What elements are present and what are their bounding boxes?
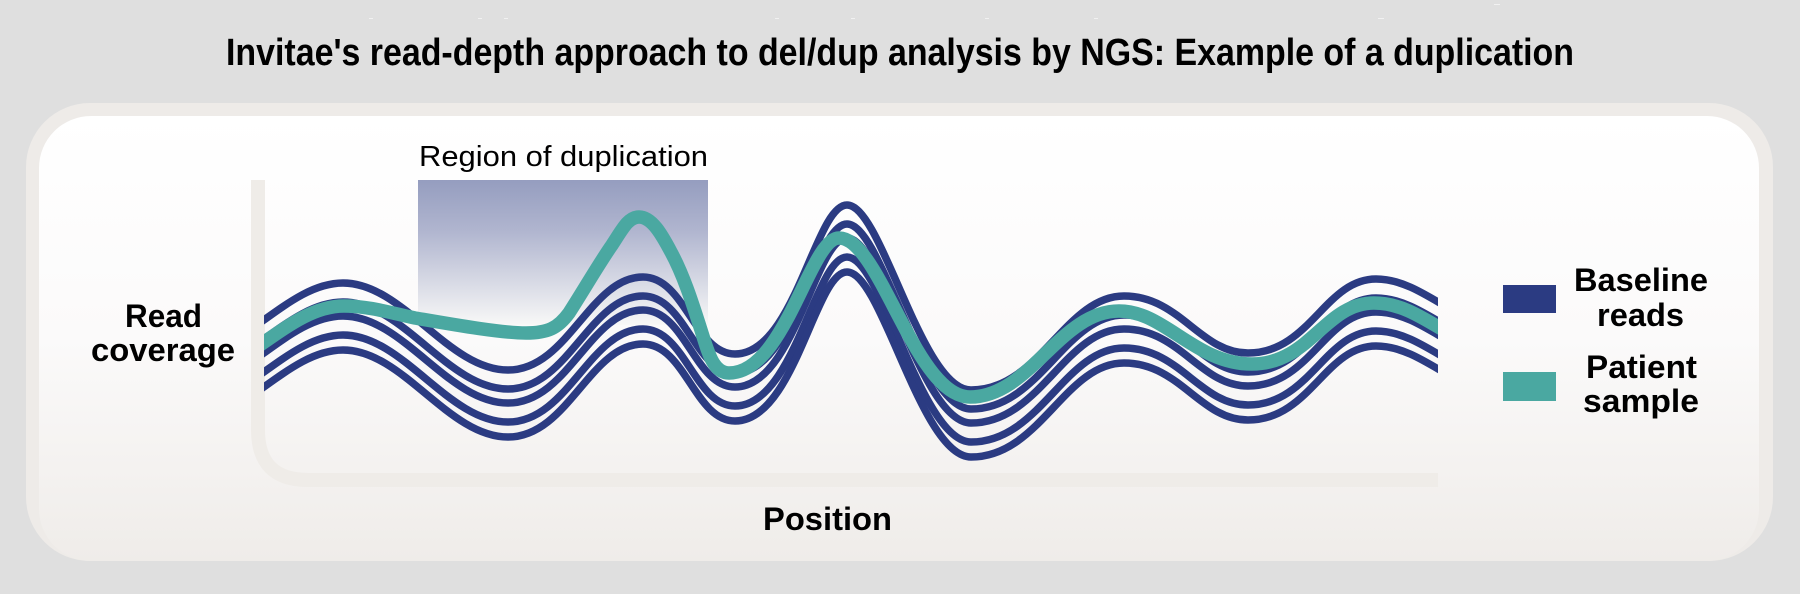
patient sample curve: [250, 217, 1450, 397]
region of duplication label: Region of duplication: [419, 141, 708, 173]
y axis label: coverage: [91, 332, 235, 368]
baseline reads curves: [250, 205, 1450, 457]
y axis label: [91, 298, 235, 368]
legend: baseline reads: reads: [1597, 297, 1684, 333]
title: Invitae's read-depth approach to del/dup analysis by NGS: Example of a duplication: [226, 32, 1574, 74]
region of duplication shaded band: [418, 180, 708, 325]
panel: chart card: [26, 103, 1773, 561]
y axis label: Read: [125, 298, 202, 334]
legend: patient sample: sample: [1583, 383, 1699, 419]
legend: baseline reads: [1503, 262, 1708, 333]
axes: [258, 180, 1438, 480]
legend: patient sample: Patient: [1586, 349, 1697, 385]
x axis label: Position: [763, 501, 892, 537]
legend: patient sample: [1503, 349, 1699, 419]
legend: baseline reads: Baseline: [1574, 262, 1708, 298]
